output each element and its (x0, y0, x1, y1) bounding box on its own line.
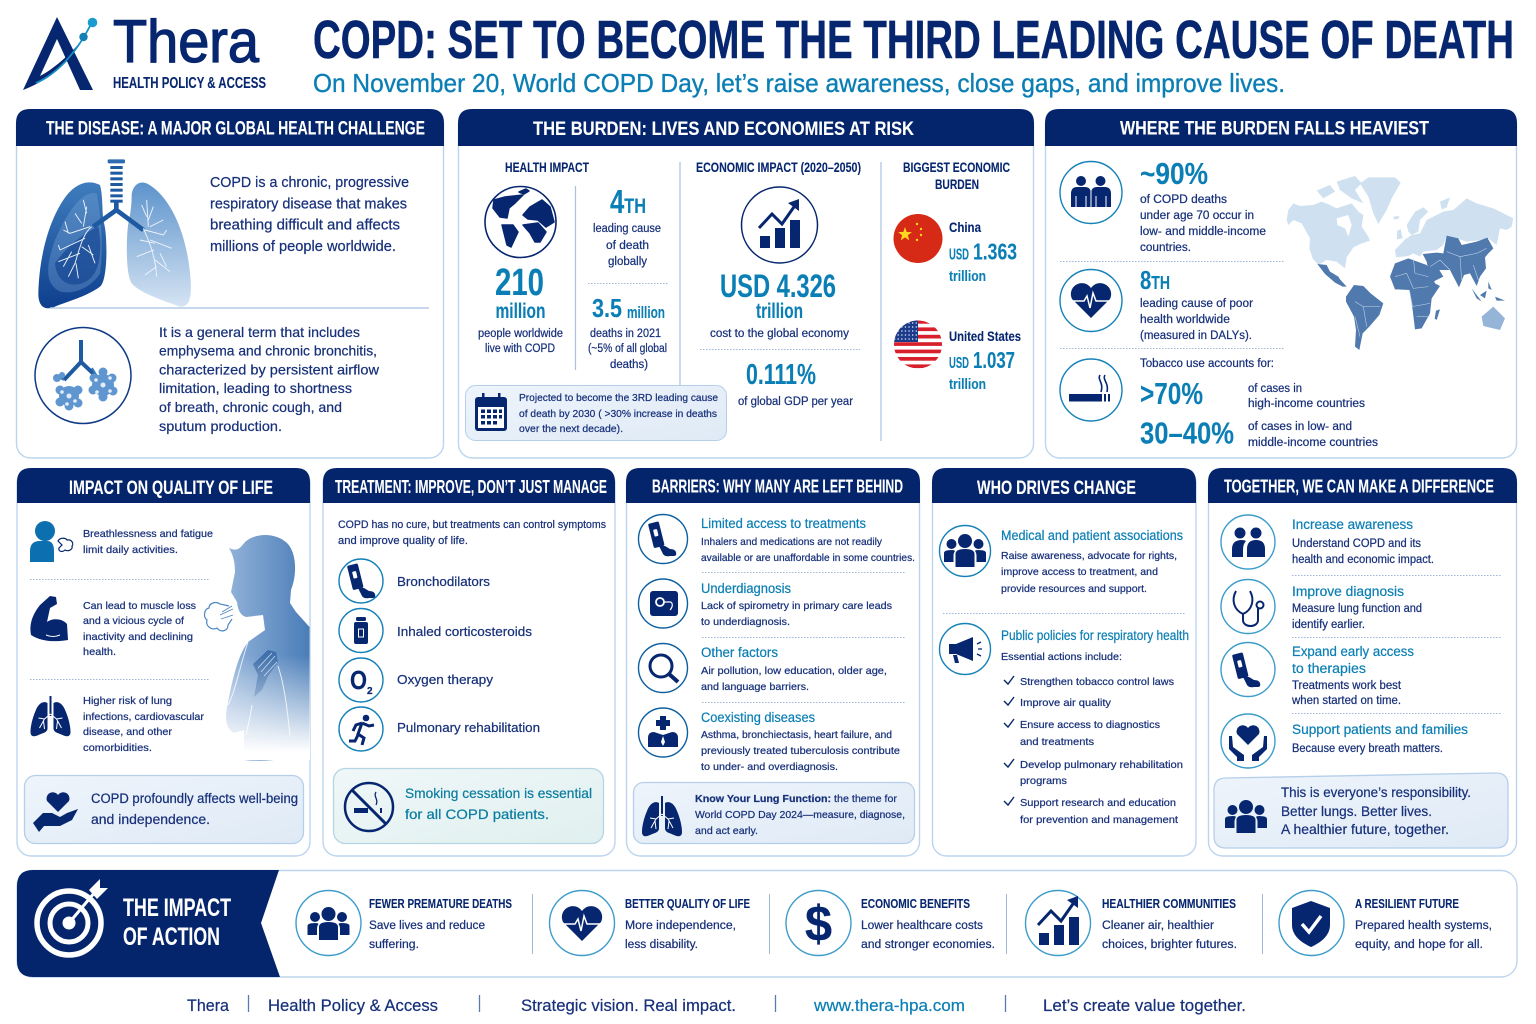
stat: 210 million (478, 262, 563, 355)
item: limited access: available or are unaffordable in some countries. (701, 552, 915, 564)
item: expand early access: Expand early access (1292, 644, 1414, 659)
stat: United States burden: United States (949, 328, 1021, 344)
callout: smoking cessation: for all COPD patients. (405, 806, 549, 822)
item: pulmonary rehabilitation: Pulmonary rehabilitation (397, 720, 540, 735)
text: higher risk: infections, cardiovascular (83, 711, 205, 723)
item: better quality of life: More independence, (625, 920, 736, 932)
stat: China burden: trillion (949, 268, 986, 285)
callout: know your lung function: World COPD Day 2024—measure, diagnose, (695, 809, 905, 821)
stat: 0.111% of GDP (738, 359, 853, 408)
panel: impact on quality of life (17, 468, 310, 856)
stat: tobacco use: Tobacco use accounts for: (1140, 358, 1274, 370)
panel: where the burden falls heaviest (1045, 109, 1517, 458)
item: economic benefits: and stronger economies. (861, 939, 995, 951)
stat: 8th: (measured in DALYs). (1140, 330, 1252, 342)
item: oxygen therapy: Oxygen therapy (397, 672, 494, 687)
item: medical and patient associations: Medical and patient associations (1001, 528, 1183, 543)
item: support patients and families: Because every breath matters. (1292, 743, 1443, 755)
checklist: essential actions: Ensure access to diagnostics (1020, 719, 1160, 731)
stat: 3.5 million deaths (588, 293, 667, 371)
item: oxygen therapy (339, 658, 494, 702)
stat: 3.5 million deaths: (~5% of all global (588, 343, 667, 355)
text: muscle loss: inactivity and declining (83, 631, 193, 643)
item: coexisting diseases (638, 708, 900, 773)
stat: 90%: under age 70 occur in (1140, 210, 1254, 222)
stat: 3.5 million deaths: deaths in 2021 (590, 328, 661, 340)
logo: Thera Health Policy & Access: Thera (113, 8, 260, 75)
item: expand early access: when started on time. (1291, 695, 1401, 707)
text: what COPD is: COPD is a chronic, progressive (210, 175, 409, 191)
footer: Health Policy & Access (268, 996, 438, 1015)
item: economic benefits: ECONOMIC BENEFITS (861, 897, 970, 911)
icon: breathless person (30, 521, 73, 562)
footer: www.thera-hpa.com (813, 996, 965, 1015)
item: coexisting diseases: to under- and overdiagnosis. (701, 761, 838, 773)
banner: the impact of action: OF ACTION (123, 923, 220, 951)
icon: no smoking (345, 783, 393, 831)
item: inhaled corticosteroids: Inhaled corticosteroids (397, 624, 533, 639)
icon: two people (1060, 162, 1122, 224)
item: oxygen therapy: 2 (367, 686, 373, 697)
stat: United States burden: USD (949, 355, 969, 372)
heading: treatment: TREATMENT: IMPROVE, DON’T JUST MANAGE (335, 476, 607, 497)
panel: who drives change (932, 468, 1196, 856)
icon: globe (485, 186, 556, 258)
stat: 8th: leading cause of poor (1140, 298, 1253, 310)
text: higher risk: Higher risk of lung (83, 695, 172, 707)
callout: everyone's responsibility: Better lungs. Better lives. (1281, 803, 1432, 819)
item: improve diagnosis: identify earlier. (1292, 619, 1365, 631)
callout: smoking cessation: Smoking cessation is essential (405, 785, 592, 801)
stat: 210 million: live with COPD (485, 343, 555, 355)
stat: China burden: China (949, 219, 981, 235)
stat: tobacco use: high-income countries (1248, 398, 1365, 410)
illustration: lungs (38, 159, 191, 308)
item: other factors: Air pollution, low education, older age, (701, 665, 887, 677)
subtitle: On November 20, World COPD Day, let’s raise awareness, close gaps, and improve lives. (313, 68, 1285, 98)
callout: everyone's responsibility: This is everyone’s responsibility. (1281, 784, 1471, 800)
text: definition: of breath, chronic cough, and (159, 399, 342, 415)
item: better quality of life: less disability. (625, 939, 698, 951)
callout: projection to 2030: over the next decade). (519, 423, 623, 435)
icon: bronchi and alveoli (35, 328, 131, 424)
stat: tobacco use: >70% (1140, 376, 1203, 411)
icon: United States flag (893, 320, 943, 370)
stat: China burden (949, 219, 1017, 285)
stat: United States burden: trillion (949, 376, 986, 393)
stat: United States burden (949, 328, 1021, 393)
callout: smoking cessation (334, 768, 604, 844)
stat: 4th leading cause: of death (606, 240, 649, 252)
item: medical and patient associations: provide resources and support. (1001, 583, 1147, 595)
item: coexisting diseases: previously treated tuberculosis contribute (701, 745, 900, 757)
heading: who drives change: WHO DRIVES CHANGE (977, 477, 1136, 499)
checklist: essential actions: programs (1020, 775, 1067, 787)
stat: tobacco use: of cases in (1248, 383, 1302, 395)
item: other factors: Other factors (701, 645, 778, 660)
subheading: biggest economic burden (903, 160, 1010, 192)
callout: projection to 2030 (466, 386, 726, 440)
stat: tobacco use: of cases in low- and (1248, 421, 1352, 433)
callout: well-being (24, 776, 304, 844)
item: public policies: Public policies for respiratory health (1001, 628, 1189, 643)
item: coexisting diseases: Asthma, bronchiectasis, heart failure, and (701, 729, 892, 741)
heading: where the burden falls heaviest: WHERE THE BURDEN FALLS HEAVIEST (1120, 118, 1429, 140)
callout: know your lung function: and act early. (695, 825, 758, 837)
item: fewer premature deaths: FEWER PREMATURE DEATHS (369, 897, 512, 911)
callout: know your lung function: Know Your Lung Function: the theme for (695, 793, 897, 805)
checklist: essential actions: Improve air quality (1020, 697, 1112, 709)
item: medical and patient associations: Raise awareness, advocate for rights, (1001, 550, 1177, 562)
icon: logo triangle mark (23, 17, 97, 90)
checklist: essential actions: Strengthen tobacco control laws (1020, 676, 1174, 688)
stat: USD 4.326 trillion: USD 4.326 (720, 268, 836, 304)
text: muscle loss: health. (83, 646, 116, 658)
item: improve diagnosis (1221, 580, 1422, 634)
item: increase awareness (1221, 515, 1434, 569)
stat: 0.111% of GDP: of global GDP per year (738, 396, 853, 408)
icon: growth chart (742, 187, 818, 263)
item: expand early access: Treatments work best (1292, 680, 1402, 692)
item: a resilient future: equity, and hope for all. (1355, 939, 1483, 951)
checklist: essential actions (1004, 676, 1183, 826)
heading: the burden: THE BURDEN: LIVES AND ECONOMIES AT RISK (533, 118, 914, 140)
illustration: man breathing (205, 535, 310, 761)
stat: 4th leading cause (593, 183, 661, 268)
item: limited access: Inhalers and medications are not readily (701, 536, 883, 548)
item: underdiagnosis: to underdiagnosis. (701, 616, 790, 628)
item: economic benefits: $ (805, 896, 832, 952)
subheading: economic impact: ECONOMIC IMPACT (2020–2050) (696, 160, 861, 175)
subheading: biggest economic burden: BURDEN (935, 177, 979, 192)
callout: projection to 2030: Projected to become the 3RD leading cause (519, 392, 718, 404)
text: breathlessness: limit daily activities. (83, 544, 178, 556)
text: what COPD is: breathing difficult and affects (210, 218, 400, 234)
stat: 8th (1140, 265, 1253, 342)
checklist: essential actions: Develop pulmonary rehabilitation (1020, 759, 1183, 771)
text: definition (159, 324, 380, 434)
panel: together we can make a difference (1208, 468, 1517, 856)
item: improve diagnosis: Improve diagnosis (1292, 584, 1404, 599)
stat: 90% (1140, 156, 1266, 254)
item: underdiagnosis: Lack of spirometry in primary care leads (701, 600, 892, 612)
stat: 0.111% of GDP: 0.111% (746, 359, 816, 391)
item: fewer premature deaths: Save lives and reduce (369, 920, 485, 932)
item: economic benefits (786, 890, 995, 956)
item: underdiagnosis (638, 579, 892, 628)
stat: 210 million: million (496, 300, 546, 323)
item: expand early access: to therapies (1292, 661, 1366, 676)
stat: 8th: health worldwide (1140, 314, 1230, 326)
icon: China flag (893, 214, 943, 264)
footer: Strategic vision. Real impact. (521, 996, 736, 1015)
item: a resilient future: A RESILIENT FUTURE (1355, 897, 1459, 911)
item: pulmonary rehabilitation (339, 707, 540, 751)
item: bronchodilators: Bronchodilators (397, 574, 491, 589)
item: increase awareness: Understand COPD and its (1292, 538, 1421, 550)
item: increase awareness: Increase awareness (1292, 517, 1413, 532)
callout: know your lung function (634, 782, 914, 844)
text: what COPD is (210, 175, 409, 255)
logo: Thera Health Policy & Access: HEALTH POLICY & ACCESS (113, 75, 266, 92)
item: limited access: Limited access to treatments (701, 516, 866, 531)
text: higher risk: disease, and other (83, 726, 173, 738)
stat: tobacco use (1140, 358, 1378, 450)
subheading: health impact: HEALTH IMPACT (505, 160, 590, 175)
item: public policies (940, 624, 1189, 674)
text: definition: emphysema and chronic bronchitis, (159, 342, 377, 358)
stat: 90%: countries. (1140, 242, 1191, 254)
stat: 90%: low- and middle-income (1140, 226, 1266, 238)
panel: treatment (323, 468, 615, 856)
text: what COPD is: millions of people worldwide. (210, 239, 396, 255)
item: expand early access (1221, 642, 1414, 707)
item: other factors: and language barriers. (701, 681, 809, 693)
stat: 3.5 million deaths: 3.5 (592, 293, 622, 323)
icon: target with arrow (37, 879, 108, 955)
logo: Thera Health Policy & Access (23, 8, 266, 92)
panel: the impact of action (17, 870, 1517, 977)
stat: USD 4.326 trillion: cost to the global economy (710, 328, 849, 340)
callout: projection to 2030: of death by 2030 ( >30% increase in deaths (519, 408, 717, 420)
stat: USD 4.326 trillion: trillion (756, 300, 803, 323)
stat: 4th leading cause: 4TH (610, 183, 646, 220)
stat: China burden: USD (949, 246, 969, 264)
item: better quality of life (550, 890, 750, 956)
panel: barriers (626, 468, 920, 856)
text: muscle loss: Can lead to muscle loss (83, 600, 196, 612)
stat: USD 4.326 trillion (710, 268, 849, 340)
heading: impact on quality of life: IMPACT ON QUALITY OF LIFE (69, 477, 273, 499)
item: public policies: Essential actions include: (1001, 651, 1122, 663)
callout: well-being: COPD profoundly affects well-being (91, 791, 298, 806)
item: better quality of life: BETTER QUALITY OF LIFE (625, 897, 750, 911)
item: support patients and families (1221, 714, 1468, 768)
stat: 90%: of COPD deaths (1140, 194, 1227, 206)
stat: 3.5 million deaths: million (627, 304, 665, 322)
checklist: essential actions: and treatments (1020, 736, 1094, 748)
item: medical and patient associations (940, 526, 1183, 595)
checklist: essential actions: Support research and education (1020, 797, 1176, 809)
item: medical and patient associations: improve access to treatment, and (1001, 566, 1158, 578)
text: definition: limitation, leading to shortness (159, 380, 352, 396)
text: what COPD is: respiratory disease that makes (210, 196, 407, 212)
text: treatment intro: COPD has no cure, but treatments can control symptoms (338, 519, 606, 531)
stat: 4th leading cause: leading cause (593, 223, 661, 235)
stat: tobacco use: middle-income countries (1248, 437, 1378, 449)
stat: United States burden: 1.037 (973, 347, 1015, 373)
item: healthier communities: choices, brighter futures. (1102, 939, 1237, 951)
text: muscle loss: and a vicious cycle of (83, 615, 184, 627)
item: a resilient future: Prepared health systems, (1355, 920, 1492, 932)
footer: Let’s create value together. (1043, 996, 1246, 1015)
item: coexisting diseases: Coexisting diseases (701, 710, 815, 725)
stat: 90%: ~90% (1140, 156, 1208, 191)
item: fewer premature deaths (296, 890, 512, 956)
icon: heart with pulse (1060, 270, 1122, 332)
text: breathlessness (83, 528, 213, 556)
text: definition: characterized by persistent airflow (159, 362, 380, 378)
stat: 4th leading cause: globally (608, 256, 647, 268)
icon: lungs (30, 696, 70, 736)
item: a resilient future (1279, 890, 1492, 956)
item: bronchodilators (339, 559, 491, 603)
heading: the disease: THE DISEASE: A MAJOR GLOBAL HEALTH CHALLENGE (46, 118, 425, 140)
text: treatment intro (338, 519, 606, 547)
stat: 210 million: 210 (495, 262, 544, 304)
banner: the impact of action: THE IMPACT (123, 894, 231, 922)
text: muscle loss (83, 600, 196, 658)
item: fewer premature deaths: suffering. (369, 939, 419, 951)
heading: barriers: BARRIERS: WHY MANY ARE LEFT BEHIND (652, 476, 903, 496)
callout: well-being: and independence. (91, 812, 210, 827)
icon: muscle arm (30, 596, 68, 641)
text: definition: sputum production. (159, 418, 282, 434)
panel: the burden (458, 109, 1034, 458)
stat: 8th: 8TH (1140, 265, 1170, 295)
item: support patients and families: Support patients and families (1292, 722, 1468, 737)
callout: everyone's responsibility: A healthier future, together. (1281, 821, 1449, 837)
text: higher risk: comorbidities. (83, 742, 152, 754)
text: definition: It is a general term that includes (159, 324, 360, 340)
item: inhaled corticosteroids (339, 608, 533, 652)
stat: 3.5 million deaths: deaths) (610, 359, 648, 371)
icon: calendar (475, 393, 507, 431)
item: economic benefits: Lower healthcare costs (861, 920, 983, 932)
text: breathlessness: Breathlessness and fatigue (83, 528, 213, 540)
checklist: essential actions: for prevention and management (1020, 814, 1178, 826)
item: other factors (638, 644, 887, 693)
text: treatment intro: and improve quality of life. (338, 535, 468, 547)
stat: 210 million: people worldwide (478, 328, 563, 340)
item: limited access (638, 514, 915, 564)
item: healthier communities (1026, 890, 1237, 956)
icon: cigarette (1060, 359, 1122, 421)
stat: China burden: 1.363 (973, 238, 1017, 264)
item: underdiagnosis: Underdiagnosis (701, 581, 791, 596)
callout: everyone's responsibility (1214, 773, 1508, 848)
footer (187, 995, 1246, 1015)
stat: tobacco use: 30–40% (1140, 416, 1234, 450)
panel: the disease (16, 109, 444, 458)
item: healthier communities: HEALTHIER COMMUNITIES (1102, 897, 1236, 911)
item: oxygen therapy: O (350, 665, 367, 695)
item: improve diagnosis: Measure lung function and (1292, 603, 1422, 615)
icon: heart in hand (33, 792, 78, 832)
subheading: biggest economic burden: BIGGEST ECONOMIC (903, 160, 1010, 175)
item: healthier communities: Cleaner air, healthier (1102, 920, 1214, 932)
footer: Thera (187, 996, 230, 1015)
text: higher risk (83, 695, 205, 754)
banner: the impact of action (17, 870, 280, 977)
chart: world map (1287, 176, 1513, 350)
item: increase awareness: health and economic impact. (1292, 554, 1434, 566)
icon: megaphone (949, 637, 982, 663)
